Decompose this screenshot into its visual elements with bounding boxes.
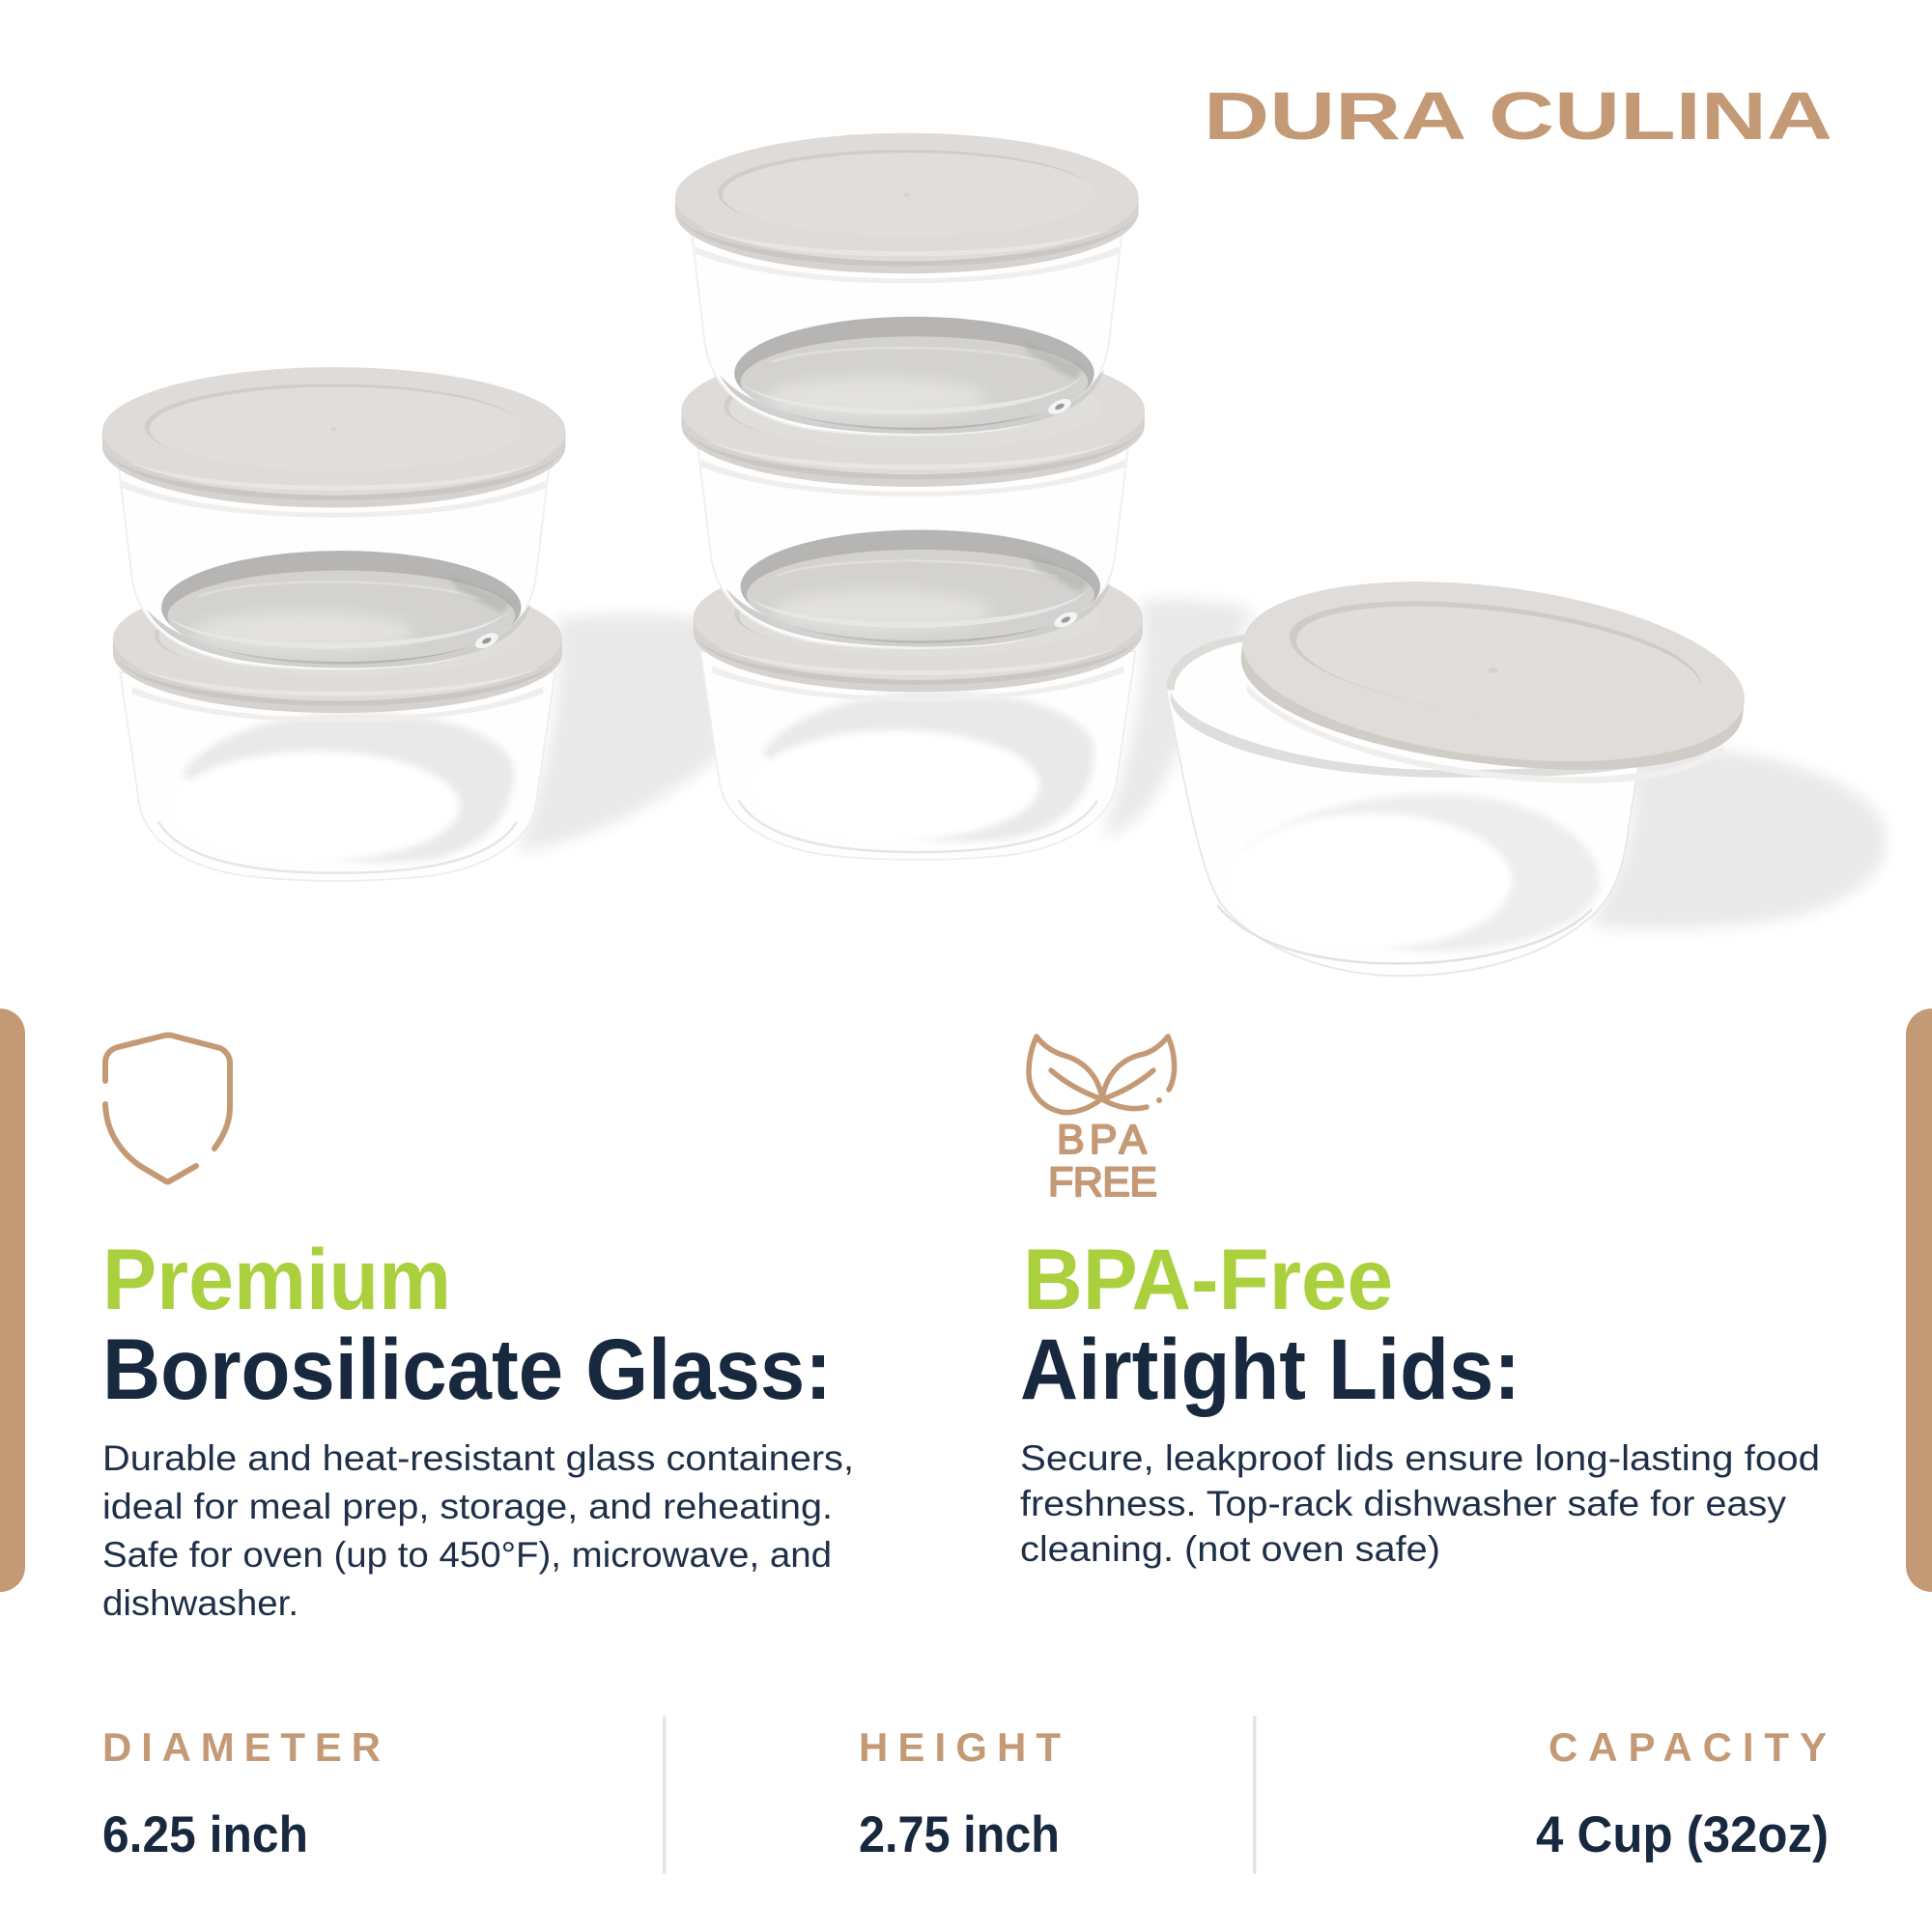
floor shadows: [518, 599, 1886, 928]
spec: height: 2.75 inch: [859, 1806, 1060, 1863]
spec: capacity: [1536, 1724, 1829, 1863]
text block: lid description: Secure, leakproof lids ensure long-lasting food: [1020, 1438, 1820, 1478]
left stack of two containers: [102, 367, 565, 881]
middle stack of three containers: [675, 133, 1145, 860]
spec: diameter: 6.25 inch: [102, 1806, 308, 1863]
icon: shield: [105, 1036, 230, 1182]
icon: BPA free leaves: FREE: [1048, 1159, 1157, 1206]
heading: BPA-Free Airtight Lids: [1020, 1231, 1520, 1417]
icon: BPA free leaves: [1029, 1037, 1175, 1206]
left tan side tab: [0, 1009, 25, 1592]
heading: Premium Borosilicate Glass: Borosilicate Glass:: [102, 1321, 832, 1417]
product photo: stacked glass containers: [102, 133, 1886, 976]
icon: BPA free leaves: BPA: [1057, 1117, 1147, 1163]
spec: height: [859, 1724, 1061, 1863]
text block: glass description: dishwasher.: [102, 1583, 298, 1623]
text block: lid description: freshness. Top-rack dishwasher safe for easy: [1020, 1484, 1787, 1523]
spec: capacity: CAPACITY: [1548, 1724, 1827, 1770]
spec: capacity: 4 Cup (32oz): [1536, 1806, 1829, 1863]
text block: glass description: Durable and heat-resistant glass containers,: [102, 1438, 854, 1478]
heading: Premium Borosilicate Glass: Premium: [102, 1231, 451, 1327]
heading: Premium Borosilicate Glass: [102, 1231, 832, 1417]
text block: lid description: cleaning. (not oven safe): [1020, 1529, 1440, 1569]
brand wordmark: DURA CULINA: DURA CULINA: [1204, 78, 1833, 154]
heading: BPA-Free Airtight Lids: BPA-Free: [1023, 1231, 1393, 1327]
spec: diameter: [102, 1724, 381, 1863]
text block: glass description: [102, 1438, 854, 1623]
right tan side tab: [1906, 1009, 1932, 1592]
text block: lid description: [1020, 1438, 1820, 1569]
tilted lid: [1230, 556, 1754, 808]
right open container with tilted lid: [1167, 556, 1754, 976]
spec: height: HEIGHT: [859, 1724, 1061, 1770]
spec: diameter: DIAMETER: [102, 1724, 381, 1770]
text block: glass description: Safe for oven (up to 450°F), microwave, and: [102, 1535, 832, 1575]
text block: glass description: ideal for meal prep, storage, and reheating.: [102, 1487, 833, 1526]
heading: BPA-Free Airtight Lids: Airtight Lids:: [1020, 1321, 1520, 1417]
